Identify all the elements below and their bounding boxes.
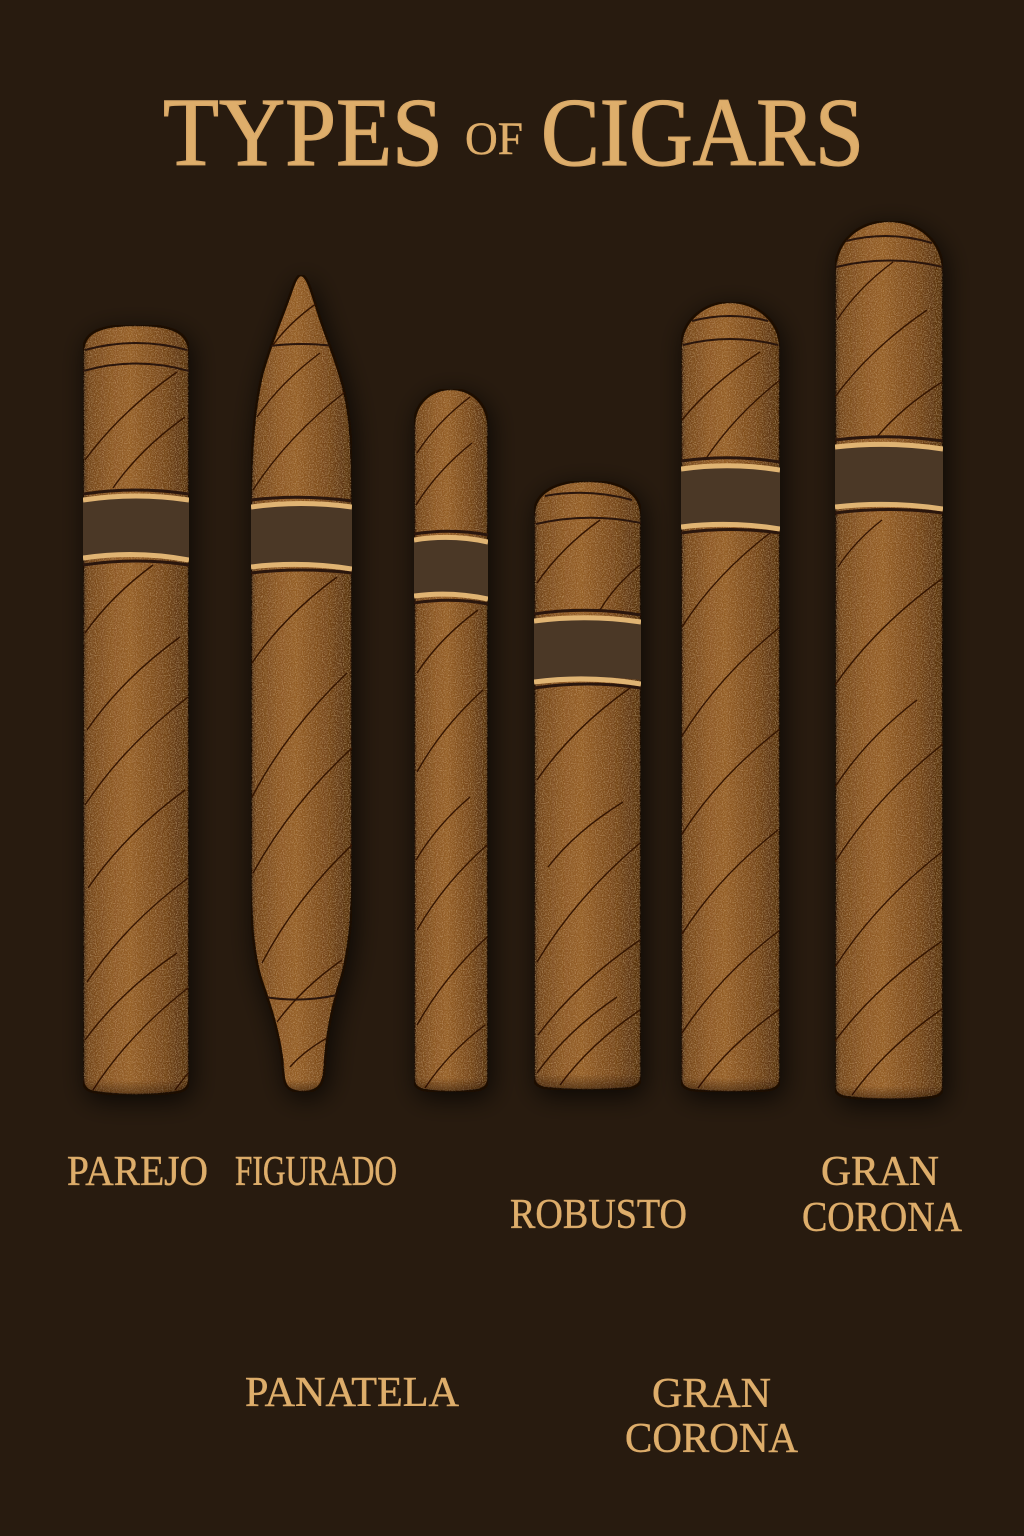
cigar: gran corona medium: [681, 302, 780, 1094]
cigar: gran corona large: [835, 221, 943, 1102]
cigar: parejo: [83, 325, 189, 1098]
label: gran corona lower: [625, 1371, 799, 1462]
label: figurado: FIGURADO: [235, 1149, 397, 1195]
title: [163, 79, 864, 187]
label: panatela: PANATELA: [245, 1370, 460, 1416]
cigar: panatela: [414, 389, 488, 1094]
title: TYPES: [163, 79, 443, 187]
label: gran corona right: CORONA: [802, 1195, 963, 1241]
label: parejo: PAREJO: [67, 1149, 208, 1195]
title: OF: [465, 113, 523, 165]
label: robusto: ROBUSTO: [510, 1192, 687, 1238]
cigar: figurado: [251, 275, 352, 1094]
title: CIGARS: [541, 79, 864, 187]
label: gran corona right: [802, 1149, 963, 1241]
label: gran corona lower: GRAN: [652, 1371, 771, 1417]
label: gran corona lower: CORONA: [625, 1416, 799, 1462]
cigar: robusto: [534, 481, 641, 1092]
label: gran corona right: GRAN: [821, 1149, 939, 1195]
infographic canvas: [68, 100, 962, 1452]
